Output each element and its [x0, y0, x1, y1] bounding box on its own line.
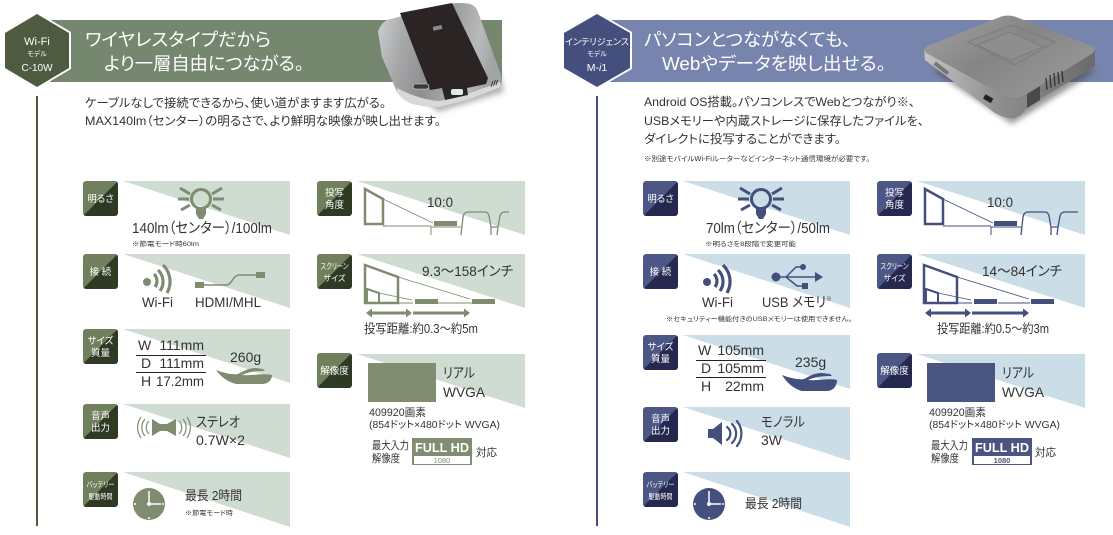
- spec: battery: バッテリー: [646, 480, 674, 489]
- spec: resolution: WVGA: [443, 384, 486, 400]
- spec: resolution: [317, 353, 525, 465]
- spec: connection: [643, 254, 852, 323]
- spec: projection angle: [317, 181, 525, 235]
- spec: brightness: ※節電モード時60lm: [132, 239, 199, 248]
- spec: brightness: [83, 181, 290, 248]
- spec: size and weight: サイズ: [647, 341, 674, 353]
- icon: clock: [133, 488, 165, 520]
- spec: connection: Wi-Fi: [702, 294, 733, 310]
- spec: battery: [643, 472, 850, 527]
- spec: size and weight: D: [141, 355, 151, 371]
- badge: full hd: FULL HD: [415, 441, 469, 455]
- model hexagon badge: モデル: [587, 49, 607, 58]
- intro text: ケーブルなしで接続できるから、使い道がますます広がる。: [85, 95, 386, 110]
- spec: size and weight: 17.2mm: [156, 373, 204, 389]
- spec: battery: 最長 2時間: [745, 496, 802, 511]
- spec: brightness: 明るさ: [647, 194, 674, 205]
- spec: size and weight: W: [698, 342, 712, 358]
- icon: hdmi cable: [195, 272, 265, 288]
- spec: projection angle: 投写: [325, 187, 344, 199]
- spec: screen size: サイズ: [883, 273, 906, 283]
- spec: audio: 出力: [651, 425, 670, 437]
- icon: hand: [216, 368, 272, 384]
- intro text: USBメモリーや内蔵ストレージに保存したファイルを、: [644, 114, 924, 128]
- spec: resolution: WVGA: [1002, 384, 1045, 400]
- badge: full hd: 1080: [434, 456, 450, 465]
- spec: audio: 0.7W×2: [196, 432, 245, 448]
- spec: projection angle: 角度: [325, 199, 344, 211]
- badge: full hd: 1080: [994, 456, 1010, 465]
- spec: screen size: サイズ: [323, 273, 346, 283]
- spec: projection angle: 投写: [885, 187, 904, 199]
- spec: battery: 駆動時間: [88, 492, 112, 501]
- diagram: projection angle: [925, 189, 1078, 235]
- spec: size and weight: 質量: [91, 347, 110, 359]
- spec: resolution: (854ドット×480ドット WVGA): [369, 420, 500, 431]
- heading: より一層自由につながる。: [104, 54, 304, 74]
- spec: battery: 駆動時間: [648, 492, 672, 501]
- spec: resolution: (854ドット×480ドット WVGA): [929, 420, 1060, 431]
- intro text: [644, 94, 924, 163]
- spec: projection angle: 10:0: [987, 195, 1013, 210]
- spec: size and weight: 105mm: [717, 360, 764, 376]
- icon: stereo speakers: [138, 417, 190, 438]
- heading: [85, 30, 304, 74]
- spec: screen size: 9.3〜158インチ: [422, 263, 513, 279]
- spec: size and weight: 105mm: [717, 342, 764, 358]
- model hexagon badge: Wi-Fi: [24, 36, 50, 48]
- icon: light bulb: [178, 188, 224, 219]
- spec: size and weight: 111mm: [159, 337, 204, 353]
- spec: resolution: 解像度: [320, 365, 349, 377]
- header band: [610, 20, 1113, 82]
- spec: size and weight: サイズ: [87, 335, 114, 347]
- intro text: ダイレクトに投写することができます。: [644, 131, 841, 146]
- panel: Wi-Fi model C-10W: [3, 3, 525, 527]
- timeline line: [36, 96, 38, 526]
- spec: resolution: 解像度: [372, 451, 400, 465]
- badge: full hd: [412, 438, 472, 465]
- timeline line: [596, 96, 598, 526]
- icon: wifi: [703, 265, 730, 293]
- spec: size and weight: H: [141, 373, 151, 389]
- diagram: screen size: [365, 265, 495, 304]
- diagram: screen size: [924, 265, 1054, 304]
- spec: brightness: 70lm（センター）/50lm: [706, 220, 830, 237]
- spec: audio: [83, 404, 290, 458]
- spec: battery: 最長 2時間: [185, 488, 242, 503]
- spec: connection: ※: [826, 296, 832, 303]
- spec: audio: 音声: [91, 410, 110, 422]
- spec: screen size: [877, 254, 1085, 336]
- spec: brightness: ※明るさを8段階で変更可能: [705, 239, 797, 248]
- model hexagon badge: モデル: [27, 49, 47, 58]
- spec: audio: ステレオ: [196, 414, 240, 430]
- icon: mono speaker: [708, 421, 741, 446]
- icon: light bulb: [738, 188, 784, 219]
- spec: screen size: 投写距離:約0.3〜約5m: [364, 321, 478, 336]
- intro text: ※別途モバイルWi-Fiルーターなどインターネット通信環境が必要です。: [644, 154, 870, 163]
- spec: resolution: 対応: [1035, 446, 1056, 459]
- icon: hand: [782, 373, 837, 391]
- spec: size and weight: 235g: [795, 354, 826, 370]
- spec: resolution: リアル: [443, 365, 475, 381]
- spec: audio: 3W: [761, 432, 783, 448]
- model hexagon badge: インテリジェンス: [565, 37, 629, 47]
- spec: size and weight: [643, 335, 850, 394]
- spec: resolution: リアル: [1002, 365, 1034, 381]
- spec: battery: [83, 472, 290, 527]
- spec: connection: 接 続: [650, 266, 672, 278]
- spec: screen size: 14〜84インチ: [982, 263, 1062, 279]
- spec: connection: ※セキュリティー機能付きのUSBメモリーは使用できません。: [666, 314, 852, 323]
- product photo: C-10W: [378, 3, 504, 112]
- spec: size and weight: [83, 329, 290, 389]
- spec: resolution: [877, 353, 1085, 465]
- badge: full hd: FULL HD: [975, 441, 1029, 455]
- model hexagon badge: [562, 12, 632, 89]
- spec: projection angle: [877, 181, 1085, 235]
- spec: brightness: [643, 181, 850, 248]
- icon: clock: [693, 488, 725, 520]
- intro text: Android OS搭載。パソコンレスでWebとつながり※、: [644, 94, 915, 109]
- spec: connection: HDMI/MHL: [195, 294, 261, 310]
- spec: projection angle: 10:0: [427, 195, 453, 210]
- intro text: MAX140lm（センター）の明るさで、より鮮明な映像が映し出せます。: [85, 113, 441, 128]
- product photo: M-i1: [924, 16, 1098, 124]
- spec: connection: [83, 254, 290, 310]
- header band: [50, 20, 502, 82]
- spec: audio: モノラル: [761, 414, 805, 430]
- spec: size and weight: 質量: [651, 353, 670, 365]
- spec: screen size: スクリーン: [880, 262, 909, 271]
- spec: size and weight: 260g: [230, 349, 261, 365]
- icon: wifi: [143, 265, 170, 293]
- spec: screen size: スクリーン: [320, 262, 349, 271]
- panel: Intelligence model M-i1: [562, 12, 1113, 527]
- diagram: projection angle: [365, 189, 509, 235]
- spec: connection: Wi-Fi: [142, 294, 173, 310]
- spec: battery: ※節電モード時: [185, 508, 234, 517]
- badge: full hd: [972, 438, 1032, 465]
- spec: resolution: 409920画素: [369, 406, 426, 419]
- spec: resolution: 対応: [476, 446, 497, 459]
- spec: size and weight: D: [701, 360, 711, 376]
- spec: size and weight: W: [138, 337, 152, 353]
- spec: screen size: 投写距離:約0.5〜約3m: [937, 321, 1049, 336]
- spec: brightness: 140lm（センター）/100lm: [132, 220, 272, 237]
- spec: resolution: 解像度: [931, 451, 959, 465]
- model hexagon badge: M-i1: [587, 62, 607, 74]
- spec: resolution: 最大入力: [372, 438, 409, 452]
- model hexagon badge: [3, 12, 71, 89]
- model hexagon badge: C-10W: [21, 63, 53, 74]
- spec: battery: バッテリー: [86, 480, 114, 489]
- spec: resolution: 解像度: [880, 365, 909, 377]
- spec: resolution: 最大入力: [931, 438, 968, 452]
- spec: connection: USB メモリ: [762, 294, 826, 310]
- spec: resolution: 409920画素: [929, 406, 986, 419]
- spec: size and weight: H: [701, 378, 711, 394]
- spec: audio: [643, 407, 850, 461]
- spec: size and weight: 22mm: [725, 378, 764, 394]
- spec: screen size: [317, 254, 525, 336]
- spec: connection: 接 続: [90, 266, 112, 278]
- heading: ワイヤレスタイプだから: [85, 30, 271, 50]
- spec: size and weight: 111mm: [159, 355, 204, 371]
- icon: usb: [772, 264, 823, 289]
- heading: Webやデータを映し出せる。: [662, 54, 886, 74]
- spec: brightness: 明るさ: [87, 194, 114, 205]
- arrows: projection distance: [925, 308, 1029, 318]
- intro text: [85, 95, 441, 128]
- spec: audio: 出力: [91, 422, 110, 434]
- arrows: projection distance: [366, 308, 470, 318]
- spec: audio: 音声: [651, 413, 670, 425]
- heading: [644, 30, 886, 74]
- spec: projection angle: 角度: [885, 199, 904, 211]
- heading: パソコンとつながなくても、: [644, 30, 851, 50]
